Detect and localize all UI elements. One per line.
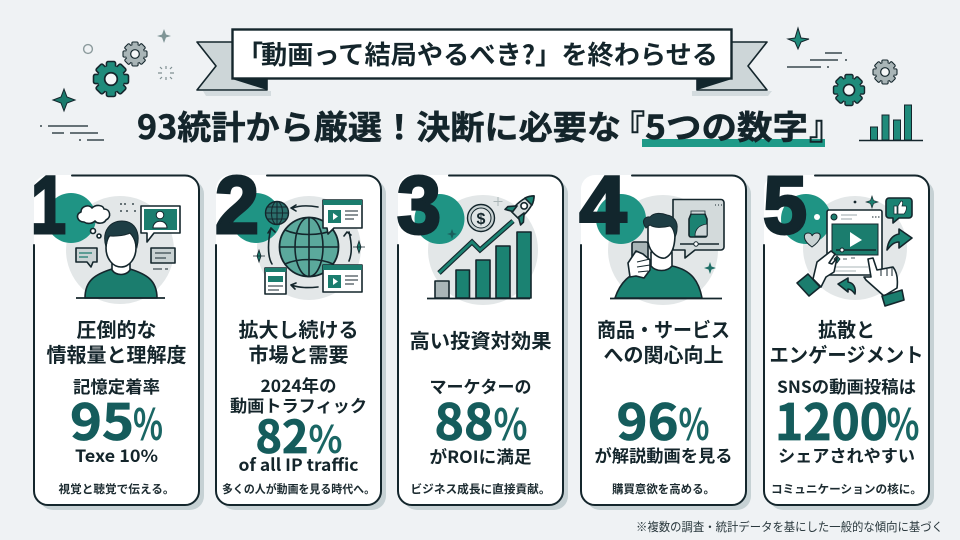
card 4 note: 購買意欲を高める。 [612, 481, 715, 497]
subtitle with highlighted phrase [137, 101, 842, 149]
number 1: 1 [31, 160, 66, 251]
icon: social video post held in hands [781, 194, 912, 306]
card 5 note: コミュニケーションの核に。 [771, 481, 922, 497]
number 3: 3 [397, 160, 441, 251]
card 3 heading: 高い投資対効果 [410, 325, 552, 354]
right decoration: gears, sparkle and bar chart [787, 28, 923, 140]
icon: globe with video windows [231, 193, 365, 300]
card 1 statistic: 95 [70, 383, 134, 455]
panel: card 1 [31, 160, 204, 510]
card 5 statistic: シェアされやすい [778, 442, 915, 467]
card 4 statistic: 96 [616, 383, 678, 455]
card 2 statistic: 動画トラフィック [230, 392, 367, 417]
card 1 heading: 情報量と理解度 [46, 339, 186, 368]
panel: card 3 [397, 160, 568, 510]
card 2 statistic: 2024年の [260, 372, 336, 397]
card 5 heading [770, 314, 924, 368]
subtitle with highlighted phrase: 5つの数字 [645, 101, 808, 149]
card 2 heading: 市場と需要 [248, 339, 348, 368]
subtitle with highlighted phrase: 93統計から厳選！決断に必要な [137, 101, 621, 149]
card 5 statistic: 1200 [775, 383, 888, 455]
card 2 note: 多くの人が動画を見る時代へ。 [222, 481, 375, 497]
number 5: 5 [763, 160, 807, 251]
card 4 heading: 商品・サービス [597, 314, 730, 343]
card 4 statistic [594, 383, 732, 467]
card 3 note: ビジネス成長に直接貢献。 [410, 481, 550, 497]
card 1 statistic: 記憶定着率 [73, 373, 160, 398]
title banner: 「 [237, 35, 263, 72]
card 2 heading: 拡大し続ける [238, 314, 358, 343]
card 1 statistic [70, 373, 163, 467]
subtitle with highlighted phrase: 』 [809, 101, 842, 149]
icon: rising bar chart with coin and rocket [414, 188, 542, 305]
card 5 statistic: % [886, 391, 920, 453]
card 3 statistic [430, 373, 532, 468]
card 1 heading: 圧倒的な [76, 314, 156, 343]
icon: person thinking with speech bubbles [46, 193, 180, 304]
icon: person watching product video on phone [596, 194, 724, 305]
number 4: 4 [580, 160, 627, 251]
card 1 statistic: Texe 10% [75, 442, 158, 467]
panel: card 5 [763, 160, 934, 510]
card 3 statistic: マーケターの [430, 373, 532, 398]
card 4 statistic: % [678, 391, 710, 453]
card 2 statistic: % [308, 409, 342, 464]
card 3 statistic: 88 [434, 383, 494, 455]
card 1 note: 視覚と聴覚で伝える。 [58, 481, 174, 497]
footnote: ※複数の調査・統計データを基にした一般的な傾向に基づく [636, 518, 943, 535]
card 2 statistic: 82 [256, 401, 308, 466]
title banner [197, 30, 772, 96]
panel: card 4 [580, 160, 751, 510]
card 3 statistic: % [494, 391, 528, 453]
card 5 heading: 拡散と [818, 314, 875, 343]
card 5 statistic: SNSの動画投稿は [777, 373, 916, 398]
left decoration: gears and sparkles [40, 29, 174, 140]
card 3 statistic: がROIに満足 [430, 443, 532, 468]
card 5 heading: エンゲージメント [770, 339, 924, 368]
card 5 statistic [775, 373, 920, 467]
subtitle with highlighted phrase: 『 [612, 101, 645, 149]
card 1 heading [46, 314, 186, 368]
card 1 statistic: % [133, 391, 163, 453]
card 2 heading [238, 314, 358, 368]
panel: card 2 [215, 160, 386, 510]
title banner: 動画って結局やるべき?」を終わらせる [261, 35, 718, 72]
card 2 statistic [230, 372, 367, 476]
card 4 heading [597, 314, 730, 368]
card 4 statistic: が解説動画を見る [594, 442, 732, 467]
card 2 statistic: of all IP traffic [238, 451, 359, 476]
card 4 heading: への関心向上 [604, 339, 724, 368]
icon: rising bar chart with coin and rocket: $ [477, 211, 486, 228]
number 2: 2 [215, 160, 259, 251]
